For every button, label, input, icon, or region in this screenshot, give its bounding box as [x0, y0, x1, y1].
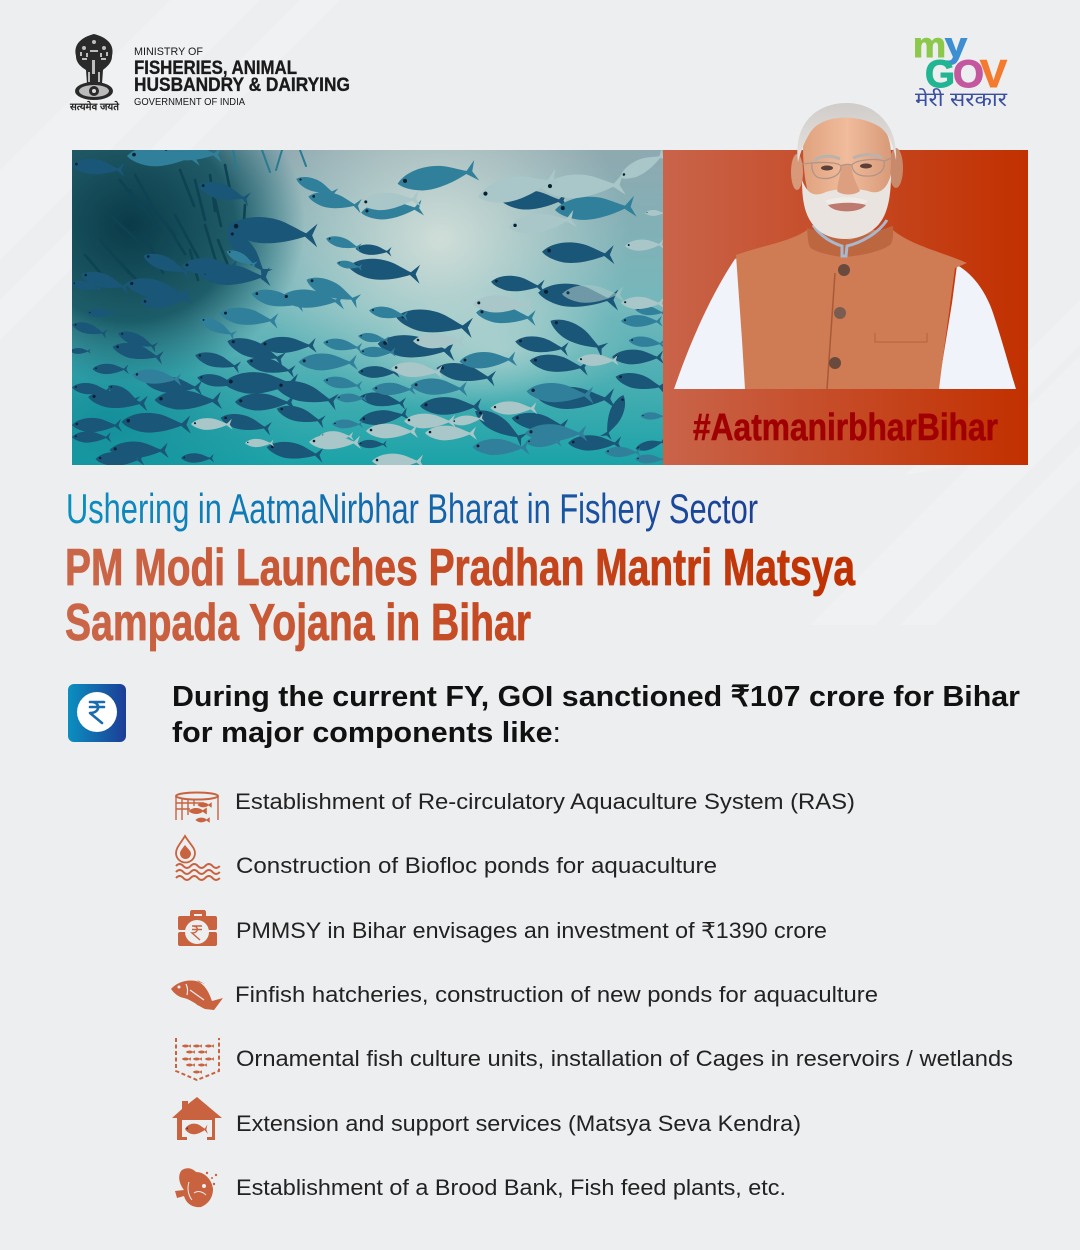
list item: Biofloc	[176, 836, 717, 880]
icon: drop and waves	[176, 836, 220, 880]
myGov logo: G	[925, 53, 955, 96]
ministry emblem	[69, 34, 120, 113]
portrait panel	[663, 103, 1028, 465]
icon: fish	[171, 980, 223, 1010]
ministry name: FISHERIES, ANIMAL	[134, 58, 297, 79]
myGov logo: y	[945, 26, 968, 65]
list item: investment	[178, 910, 827, 946]
list item: ornamental	[176, 1038, 1013, 1080]
hashtag: #AatmanirbharBihar	[693, 407, 998, 449]
portrait	[674, 103, 1016, 389]
icon: rupee badge	[68, 684, 126, 742]
ministry name	[134, 46, 350, 108]
icon: dashed net	[176, 1038, 219, 1080]
list item: hatcheries: Finfish hatcheries, construction of new ponds for aquaculture	[235, 982, 878, 1007]
list item: hatcheries	[171, 980, 878, 1010]
icon: fish cage	[176, 792, 218, 823]
intro statement: During the current FY, GOI sanctioned ₹107 crore for Bihar	[172, 681, 1020, 713]
intro statement	[172, 681, 1020, 749]
icon: round fish	[175, 1168, 217, 1207]
list item: RAS	[176, 789, 855, 823]
myGov logo: V	[980, 53, 1007, 96]
myGov logo: O	[953, 53, 984, 96]
dark background shoal	[85, 150, 306, 288]
list item: extension: Extension and support services (Matsya Seva Kendra)	[236, 1111, 801, 1136]
light fish	[191, 147, 669, 468]
list item: brood bank	[175, 1168, 786, 1207]
list item: ornamental: Ornamental fish culture units, installation of Cages in reservoirs / wetlands	[236, 1046, 1013, 1071]
ministry name: HUSBANDRY & DAIRYING	[134, 75, 350, 96]
intro statement: for major components like :	[172, 717, 561, 749]
list item: investment: PMMSY in Bihar envisages an investment of ₹1390 crore	[236, 918, 827, 943]
icon: briefcase	[178, 910, 217, 946]
list item: Biofloc: Construction of Biofloc ponds for aquaculture	[236, 853, 717, 878]
list item: brood bank: Establishment of a Brood Bank, Fish feed plants, etc.	[236, 1175, 786, 1200]
icon: fish house	[172, 1097, 222, 1140]
fish school photo	[72, 150, 663, 465]
main title: Sampada Yojana in Bihar	[65, 594, 531, 652]
emblem motto: सत्यमेव जयते	[69, 100, 120, 113]
main title	[65, 539, 856, 652]
myGov Hindi tagline: मेरी सरकार	[915, 88, 1008, 111]
list item: extension	[172, 1097, 801, 1140]
subtitle: Ushering in AatmaNirbhar Bharat in Fishery Sector	[66, 485, 758, 532]
myGov logo	[913, 26, 1008, 111]
mid fish	[127, 141, 667, 463]
myGov logo: m	[913, 26, 946, 65]
ministry name: MINISTRY OF	[134, 46, 203, 58]
dark fish	[70, 157, 668, 466]
list item: RAS: Establishment of Re-circulatory Aquaculture System (RAS)	[235, 789, 855, 814]
ministry name: GOVERNMENT OF INDIA	[134, 96, 245, 108]
